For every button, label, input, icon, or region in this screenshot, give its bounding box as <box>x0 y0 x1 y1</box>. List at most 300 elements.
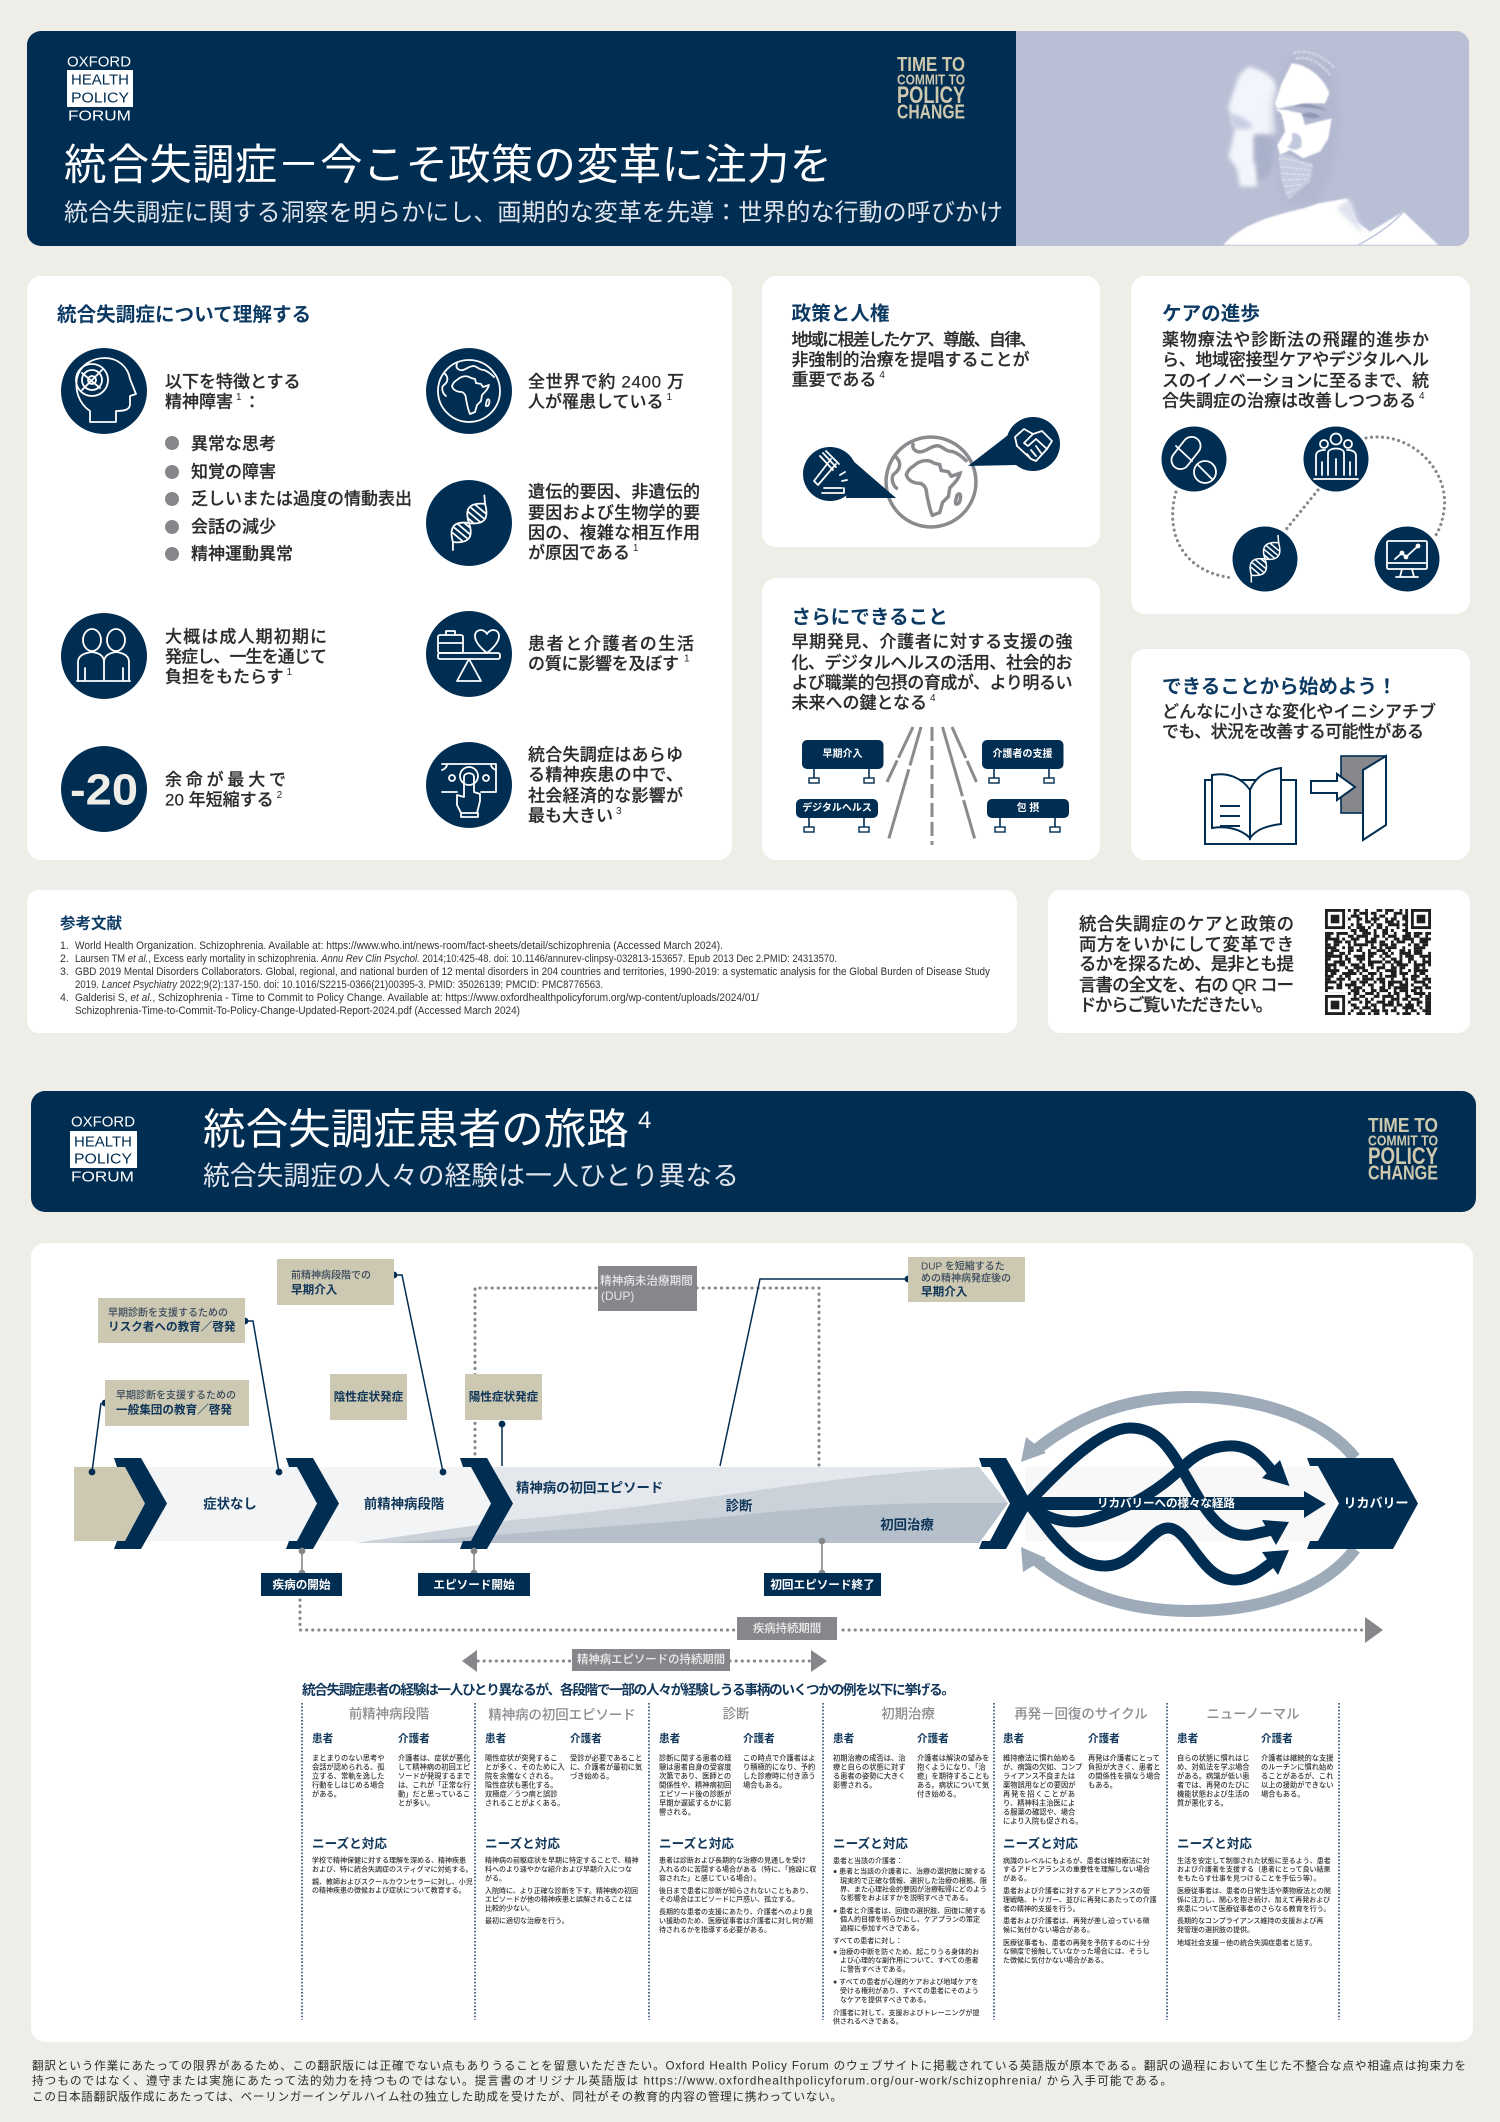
column: diagnosis: 患者 <box>659 1732 681 1745</box>
QR code <box>1325 909 1431 1015</box>
column: first episode: 介護者 <box>570 1732 602 1745</box>
reference list: Galderisi S, et al., Schizophrenia - Time to Commit to Policy Change. Available at: https://www.oxfordhealthpolicyforum.org/wp-content/uploads/2024/01/ <box>75 992 759 1004</box>
recovery block <box>1307 1458 1418 1549</box>
column: initial treatment: すべての患者に対し： <box>833 1936 902 1945</box>
translation disclaimer: この日本語翻訳版作成にあたっては、ベーリンガーインゲルハイム社の独立した助成を受けたが、同社がその教育的内容の管理に携わっていない。 <box>32 2090 842 2104</box>
panel: understanding schizophrenia: 20 年短縮する <box>165 790 274 810</box>
column: relapse-recovery cycle: するアドヒアランスの重要性を理解しない場合 <box>1003 1864 1150 1874</box>
icon: monitor <box>1374 526 1440 592</box>
panel: understanding schizophrenia: 3 <box>616 806 622 816</box>
superscript: 1 <box>684 654 690 664</box>
column: new normal: ニーズと対応 <box>1177 1836 1252 1851</box>
symptom list: 知覚の障害 <box>191 462 276 482</box>
milestone stems <box>299 1538 825 1576</box>
heading: できることから始めよう！ <box>1162 676 1397 698</box>
text: causes: 遺伝的要因、非遺伝的 <box>528 482 700 502</box>
column: initial treatment: よび心理的な副作用について、すべての患者 <box>840 1956 979 1964</box>
handshake <box>1015 429 1052 461</box>
column: new normal: 以上の援助ができない <box>1261 1780 1334 1790</box>
column: new normal: 生活を安定して制御された状態に至るよう、患者 <box>1177 1856 1331 1865</box>
callout: shorten DUP: DUP を短縮するた <box>921 1260 1005 1272</box>
panel: understanding schizophrenia: 1 <box>666 392 672 402</box>
column: relapse-recovery cycle: 者の精神的支援を行う。 <box>1003 1904 1080 1913</box>
column: prodromal: の精神疾患の徴候および症状について教育する。 <box>312 1886 466 1894</box>
column: initial treatment: ● すべての患者が心理的ケアおよび地域ケアを <box>833 1977 978 1986</box>
column: relapse-recovery cycle: により入院も促される。 <box>1003 1816 1083 1826</box>
logo: Time to Commit to Policy Change: COMMIT TO <box>1368 1132 1438 1150</box>
callout: negative symptoms: 陰性症状発症 <box>334 1390 404 1404</box>
milestone: illness onset: 疾病の開始 <box>273 1578 331 1592</box>
column: initial treatment: 個人的目標を明らかにし、ケアプランの策定 <box>840 1914 980 1924</box>
reference list: World Health Organization. Schizophrenia. Available at: https://www.who.int/news-room/fact-sheets/detail/schizophrenia (Accessed March 2024). <box>75 940 723 952</box>
icon: balance <box>426 611 512 697</box>
text: 早期発見、介護者に対する支援の強 <box>792 632 1072 652</box>
reference list: 2019. Lancet Psychiatry 2022;9(2):137-150. doi: 10.1016/S2215-0366(21)00395-3. PMID: 35026139; PMCID: PMC8776563. <box>75 979 603 991</box>
icon: minus 20 <box>61 746 147 832</box>
column: diagnosis: 長期的な患者の支援にあたり、介護者へのより良 <box>659 1907 813 1916</box>
callout: DUP: 精神病未治療期間 <box>600 1274 693 1288</box>
column: prodromal: 介護者 <box>398 1732 430 1745</box>
column: new normal: および介護者を支援する（患者にとって良い結果 <box>1177 1864 1330 1874</box>
column: initial treatment: 供されるべきである。 <box>833 2016 903 2026</box>
logo: Time to Commit to Policy Change: CHANGE <box>1368 1162 1438 1184</box>
reference list: 1. <box>60 940 69 952</box>
logo: Time to Commit to Policy Change: TIME TO <box>1368 1115 1438 1137</box>
column: initial treatment: 初期治療 <box>881 1706 935 1722</box>
column: relapse-recovery cycle: の関係性を損なう場合 <box>1088 1772 1161 1780</box>
panel: journey <box>31 1243 1473 2042</box>
subtitle: 統合失調症の人々の経験は一人ひとり異なる <box>203 1161 739 1191</box>
arrow: illness duration <box>1365 1617 1383 1643</box>
reference list: Laursen TM et al., Excess early mortality in schizophrenia. Annu Rev Clin Psychol. 2014;10:425-48. doi: 10.1146/annurev-clinpsy-032813-153657. Epub 2013 Dec 2.PMID: 24313570. <box>75 953 837 965</box>
column: first episode: 陽性症状が突発するこ <box>485 1754 558 1762</box>
column: new normal: 介護者 <box>1261 1732 1293 1745</box>
column: initial treatment: に警告すべきである。 <box>840 1964 909 1974</box>
callout: negative symptoms <box>330 1374 407 1420</box>
text: life expectancy: 余命が最大で <box>165 770 286 790</box>
stage labels: 症状なし <box>203 1496 257 1512</box>
column: prodromal: および、特に統合失調症のスティグマに対処する。 <box>312 1864 473 1874</box>
icon: money hand <box>426 742 512 828</box>
text: 統合失調症のケアと政策の <box>1079 914 1294 934</box>
column: initial treatment: 初期治療の成否は、治 <box>833 1754 906 1762</box>
column: relapse-recovery cycle: がある。 <box>1003 1874 1031 1882</box>
label: pathways to recovery: リカバリーへの様々な経路 <box>1097 1496 1235 1510</box>
logo: Time to Commit to Policy Change: CHANGE <box>897 102 965 124</box>
column: new normal <box>1177 1706 1334 1947</box>
column dividers <box>302 1703 1339 2020</box>
column: prodromal: ソードが発現するまで <box>398 1772 471 1780</box>
column: diagnosis: この時点で介護者はよ <box>743 1754 816 1762</box>
symptom list: 会話の減少 <box>191 518 276 536</box>
column: initial treatment: ある。病状について気 <box>917 1780 989 1790</box>
panel: what more can be done: 未来への鍵となる <box>792 694 927 712</box>
panel: understanding schizophrenia <box>27 276 732 860</box>
reference list: 2. <box>60 953 69 965</box>
column: diagnosis: 早期か遅延するかに影 <box>659 1798 732 1808</box>
column: diagnosis: り積極的になり、予約 <box>743 1762 815 1772</box>
column: first episode: 比較的少ない。 <box>485 1904 534 1912</box>
column: diagnosis: 験は患者自身の受容度 <box>659 1762 732 1772</box>
column: diagnosis: 容された」と感じている場合）。 <box>659 1874 760 1882</box>
translation disclaimer: 持つものではなく、遵守または実施にあたって法的効力を持つものではない。提言書のオリジナル英語版は https://www.oxfordhealthpolicyforum.org/our-work/schizophrenia/ から入手可能である。 <box>32 2074 1172 2088</box>
translation disclaimer <box>32 2058 1466 2104</box>
column: prodromal: 動」だと思っているこ <box>398 1790 470 1798</box>
symptom list: 異常な思考 <box>191 434 276 454</box>
callout: DUP <box>598 1266 697 1311</box>
column: diagnosis: 患者は診断および長期的な治療の見通しを受け <box>659 1856 806 1864</box>
logo: Time to Commit to Policy Change <box>897 54 965 124</box>
column: prodromal: ニーズと対応 <box>312 1836 387 1851</box>
column: first episode: 陰性症状も悪化する。 <box>485 1780 558 1790</box>
logo: Oxford Health Policy Forum: FORUM <box>71 1168 134 1186</box>
heading: 参考文献 <box>60 914 123 932</box>
sign: digital health <box>796 799 878 832</box>
panel: understanding schizophrenia: 精神障害 <box>165 392 233 412</box>
column: new normal: め、対処法を学ぶ場合 <box>1177 1762 1250 1772</box>
heading: さらにできること <box>792 606 948 628</box>
column: prodromal: 会話が認められる、孤 <box>312 1762 385 1772</box>
sign: inclusion <box>987 799 1069 832</box>
column: diagnosis: 響される。 <box>659 1808 695 1816</box>
column: prodromal <box>312 1706 473 1894</box>
column: first episode: 双極症／うつ病と誤診 <box>485 1790 558 1798</box>
column: diagnosis: 待されるかを指導する必要がある。 <box>659 1925 771 1934</box>
panel: what more can be done: 4 <box>930 692 936 704</box>
callout: shorten DUP: 早期介入 <box>921 1284 968 1298</box>
icon: book <box>1205 768 1296 844</box>
column: relapse-recovery cycle: な頻度で接触していなかった場合には、そうし <box>1003 1946 1150 1956</box>
sign: inclusion: 包 摂 <box>1017 801 1039 814</box>
stage labels: 前精神病段階 <box>364 1496 445 1512</box>
panel: understanding schizophrenia: 1 <box>236 392 242 402</box>
column: relapse-recovery cycle: 理戦略、トリガー、並びに再発にあたっての介護 <box>1003 1895 1157 1904</box>
icon: community group <box>1304 426 1368 492</box>
column: first episode: づき始める。 <box>570 1772 614 1780</box>
reference list: GBD 2019 Mental Disorders Collaborators. Global, regional, and national burden of 12 mental disorders in 204 countries and territories, 1990-2019: a systematic analysis for the Global Burden of Disease Study <box>75 966 991 978</box>
column: initial treatment: 受ける権利があり、すべての患者にそのよう <box>840 1986 979 1995</box>
column: prodromal: 行動をしはじめる場合 <box>312 1780 385 1790</box>
panel: understanding schizophrenia: 負担をもたらす <box>165 668 284 686</box>
logo: Oxford Health Policy Forum: OXFORD <box>67 54 131 70</box>
panel: progress in care <box>1131 276 1470 614</box>
label: episode duration <box>572 1649 730 1671</box>
panel: QR code call to action: るかを探るため、是非とも提 <box>1079 954 1294 974</box>
arrows: episode duration <box>462 1650 827 1672</box>
column: initial treatment: 現実的で正確な情報、選択した治療の根拠、限 <box>840 1876 987 1885</box>
column: relapse-recovery cycle: 負担が大きく、患者と <box>1088 1762 1161 1772</box>
column: prodromal: まとまりのない思考や <box>312 1754 385 1762</box>
column: initial treatment: ● 治療の中断を防ぐため、起こりうる身体的お <box>833 1947 979 1956</box>
shoulder <box>1223 198 1438 245</box>
column: first episode: に、介護者が最初に気 <box>570 1762 642 1772</box>
column: relapse-recovery cycle: り、精神科主治医によ <box>1003 1798 1075 1808</box>
column: first episode: 精神病の初回エピソード <box>488 1708 636 1722</box>
column: relapse-recovery cycle: 患者および介護者に対するアドヒアランスの管 <box>1003 1886 1150 1895</box>
column: new normal: 地域社会支援－他の統合失調症患者と話す。 <box>1177 1938 1316 1947</box>
column: prodromal: とが多い。 <box>398 1798 434 1808</box>
column: diagnosis: 入れるのに苦闘する場合がある（特に、「施設に収 <box>659 1864 816 1874</box>
column: relapse-recovery cycle: 患者および介護者は、再発が差し迫っている徴 <box>1003 1916 1150 1925</box>
column: initial treatment: 過程に参加すべきである。 <box>840 1924 923 1932</box>
features <box>1293 104 1327 111</box>
intro sentence: 統合失調症患者の経験は一人ひとり異なるが、各段階で一部の人々が経験しうる事柄のいくつかの例を以下に挙げる。 <box>302 1682 955 1698</box>
column: diagnosis: した診療時に付き添う <box>743 1772 816 1780</box>
panel: what more can be done: よび職業的包摂の育成が、より明るい <box>792 672 1072 692</box>
column: new normal: 疾患について医療従事者のさらなる教育を行う。 <box>1177 1904 1330 1913</box>
text: quality of life: 患者と介護者の生活 <box>528 634 694 654</box>
column: relapse-recovery cycle: ニーズと対応 <box>1003 1836 1078 1851</box>
column: diagnosis: その場合はエピソードに戸惑い、孤立する。 <box>659 1894 799 1904</box>
icon: globe <box>426 348 512 434</box>
column: first episode: 科へのより速やかな紹介および早期介入につな <box>485 1864 632 1874</box>
dotted line: DUP bracket <box>475 1288 819 1465</box>
column: prodromal: 学校で精神保健に対する理解を深める、精神疾患 <box>312 1856 466 1864</box>
sign: early intervention <box>802 740 884 783</box>
logo: Time to Commit to Policy Change: COMMIT TO <box>897 72 965 88</box>
heading: 政策と人権 <box>792 303 889 325</box>
logo: Time to Commit to Policy Change: POLICY <box>1368 1143 1438 1170</box>
text: socio-economic impact: 統合失調症はあらゆ <box>528 746 683 764</box>
panel: start where you can <box>1131 649 1470 860</box>
callout: at-risk education: リスク者への教育／啓発 <box>108 1320 236 1334</box>
panel: understanding schizophrenia: 最も大きい <box>528 806 613 826</box>
column: diagnosis: い援助のため、医療従事者は介護者に対し何が期 <box>659 1916 813 1925</box>
column: initial treatment: ● 患者と介護者は、回復の選択肢、回復に関する <box>833 1906 986 1915</box>
column: initial treatment: 癒」を期待することも <box>917 1772 990 1780</box>
reference list <box>60 940 991 1017</box>
translation disclaimer: 翻訳という作業にあたっての限界があるため、この翻訳版には正確でない点もありうることを留意いただきたい。Oxford Health Policy Forum のウェブサイトに掲載されている英語版が原本である。翻訳の過程において生じた不整合な点や相違点は拘束力を <box>32 2058 1466 2072</box>
panel: QR code call to action: ドからご覧いただきたい。 <box>1079 995 1273 1015</box>
logo: Time to Commit to Policy Change: TIME TO <box>897 54 965 76</box>
column: new normal: 者では、再発のたびに <box>1177 1780 1250 1790</box>
panel: understanding schizophrenia: 1 <box>633 542 639 554</box>
icon: DNA <box>426 480 512 566</box>
title: 統合失調症患者の旅路 <box>203 1106 629 1154</box>
column: prodromal: して精神病の初回エピ <box>398 1762 470 1772</box>
column: new normal: 自らの状態に慣れはじ <box>1177 1754 1250 1762</box>
panel: references <box>27 890 1017 1033</box>
callout: at-risk education <box>98 1298 245 1343</box>
callout: positive symptoms: 陽性症状発症 <box>469 1390 539 1404</box>
panel: QR code call to action: 両方をいかにして変革でき <box>1079 934 1294 954</box>
logo: Oxford Health Policy Forum: POLICY <box>71 90 129 106</box>
column: new normal: ニューノーマル <box>1207 1706 1299 1722</box>
panel: policy and human rights <box>762 276 1100 547</box>
panel: progress in care: ら、地域密接型ケアやデジタルヘル <box>1162 350 1429 370</box>
logo: Oxford Health Policy Forum <box>70 1114 137 1186</box>
column: new normal: のルーチンに慣れ始め <box>1261 1762 1334 1772</box>
column: relapse-recovery cycle: 患者 <box>1003 1732 1025 1745</box>
column: new normal: 機能状態および生活の <box>1177 1790 1250 1798</box>
recovery pathways <box>1028 1428 1326 1580</box>
panel: QR code call to action <box>1048 890 1470 1033</box>
callout: at-risk education: 早期診断を支援するための <box>108 1306 228 1319</box>
column: initial treatment: 介護者に対して、支援およびトレーニングが提 <box>833 2008 979 2017</box>
logo: Oxford Health Policy Forum <box>67 54 133 124</box>
leader lines <box>89 1272 911 1475</box>
column: first episode: 院を余儀なくされる。 <box>485 1772 558 1780</box>
logo: Oxford Health Policy Forum: FORUM <box>68 108 131 124</box>
callout: positive symptoms <box>465 1374 542 1420</box>
column: first episode: エピソードが他の精神疾患と誤解されることは <box>485 1894 632 1904</box>
sign: carer support: 介護者の支援 <box>992 747 1052 760</box>
right face cheek <box>1276 109 1332 158</box>
column: relapse-recovery cycle: 再発－回復のサイクル <box>1014 1706 1148 1722</box>
gavel <box>814 451 839 485</box>
recovery block: リカバリー <box>1343 1496 1409 1510</box>
shadow behind right face <box>1269 85 1282 136</box>
column: relapse-recovery cycle: 再発を招くことがあ <box>1003 1790 1075 1798</box>
column: first episode: されることがよくある。 <box>485 1798 564 1808</box>
panel: progress in care: 4 <box>1419 390 1425 402</box>
logo: Oxford Health Policy Forum: HEALTH <box>74 1134 132 1150</box>
text: 24 million: 全世界で約 2400 万 <box>528 372 684 392</box>
icon: pills <box>1162 426 1226 492</box>
header banner <box>27 31 1469 246</box>
milestone: first episode end <box>764 1573 881 1596</box>
column: relapse-recovery cycle: が、病識の欠如、コンプ <box>1003 1762 1083 1772</box>
milestone: first episode end: 初回エピソード終了 <box>770 1578 875 1592</box>
column: relapse-recovery cycle: た徴候に気付かない場合がある。 <box>1003 1956 1108 1964</box>
column: relapse-recovery cycle: もある。 <box>1088 1780 1117 1790</box>
right face forehead <box>1275 63 1329 109</box>
column: first episode: 受診が必要であること <box>570 1754 642 1762</box>
journey banner <box>31 1091 1476 1212</box>
column: initial treatment: 介護者は解決の望みを <box>917 1754 990 1762</box>
chevron: stage markers <box>114 1458 1032 1549</box>
column: initial treatment: 患者 <box>833 1732 855 1745</box>
sign: carer support <box>982 740 1064 783</box>
panel: what more can be done: 化、デジタルヘルスの活用、社会的お <box>792 652 1072 672</box>
dotted line: illness duration <box>300 1600 1365 1630</box>
stage labels: 診断 <box>726 1498 753 1514</box>
column: new normal: をもたらす仕事を見つけることを手伝う等）。 <box>1177 1874 1320 1882</box>
column: prodromal: 立する、常軌を逸した <box>312 1772 385 1780</box>
column: relapse-recovery cycle: 再発は介護者にとって <box>1088 1754 1160 1762</box>
column: diagnosis: 後日まで患者に診断が知らされないこともあり、 <box>659 1886 813 1895</box>
icon: door and arrow <box>1311 756 1386 840</box>
column: diagnosis: ニーズと対応 <box>659 1836 734 1851</box>
column: diagnosis: 関係性や、精神病初回 <box>659 1780 731 1790</box>
photo: two faces <box>1016 31 1469 246</box>
column: relapse-recovery cycle: 医療従事者も、患者の再発を予防するのに十分 <box>1003 1938 1150 1947</box>
column: new normal: ることがあるが、これ <box>1261 1772 1334 1780</box>
column: first episode: 精神病の前駆症状を早期に特定することで、精神 <box>485 1856 639 1864</box>
label: episode duration: 精神病エピソードの持続期間 <box>577 1652 725 1666</box>
column: diagnosis <box>659 1706 816 1934</box>
column: relapse-recovery cycle: 病識のレベルにもよるが、患者は維持療法に対 <box>1003 1856 1150 1865</box>
column: first episode: がる。 <box>485 1874 506 1882</box>
panel: policy and human rights: 4 <box>879 370 885 380</box>
recovery loops <box>1021 1397 1355 1611</box>
milestone: episode onset: エピソード開始 <box>433 1578 515 1592</box>
reference list: 4. <box>60 992 69 1004</box>
logo: Oxford Health Policy Forum: OXFORD <box>71 1114 135 1130</box>
column: initial treatment <box>833 1706 990 2026</box>
dotted connectors <box>1173 437 1445 578</box>
text: どんなに小さな変化やイニシアチブ <box>1162 702 1436 722</box>
column: new normal: 質が悪化する。 <box>1177 1798 1228 1808</box>
icon: two people <box>61 613 147 699</box>
column: relapse-recovery cycle <box>1003 1706 1161 1964</box>
column: initial treatment: 患者と当該の介護者： <box>833 1856 903 1865</box>
column: first episode: 患者 <box>485 1732 507 1745</box>
panel: understanding schizophrenia: 要因および生物学的要 <box>528 504 700 522</box>
column: initial treatment: 付き始める。 <box>917 1790 961 1798</box>
column: new normal: 係に注力し、関心を抱き続け、加えて再発および <box>1177 1895 1330 1904</box>
column: initial treatment: ニーズと対応 <box>833 1836 908 1851</box>
column: diagnosis: 場合もある。 <box>743 1780 787 1790</box>
symptom list <box>165 434 412 564</box>
hair <box>1293 52 1335 75</box>
panel: progress in care: スのイノベーションに至るまで、統 <box>1162 372 1429 390</box>
stage labels: 精神病の初回エピソード <box>516 1480 663 1496</box>
column: new normal: がある。病識が低い患 <box>1177 1772 1250 1780</box>
column: relapse-recovery cycle: 介護者 <box>1088 1732 1120 1745</box>
panel: what more can be done <box>762 578 1100 860</box>
logo: Oxford Health Policy Forum: POLICY <box>74 1150 132 1168</box>
stage labels <box>203 1480 934 1532</box>
title: 統合失調症－今こそ政策の変革に注力を <box>64 142 832 188</box>
panel: understanding schizophrenia: 発症し、一生を通じて <box>165 648 327 666</box>
panel: understanding schizophrenia: 人が罹患している <box>528 392 664 412</box>
stage labels: 初回治療 <box>880 1516 934 1532</box>
column: initial treatment: な影響をおよぼすかを説明すべきである。 <box>840 1893 972 1902</box>
panel: understanding schizophrenia: 2 <box>277 790 283 800</box>
panel: progress in care: 合失調症の治療は改善しつつある <box>1162 392 1416 410</box>
column: diagnosis: 介護者 <box>743 1732 775 1745</box>
journey band <box>74 1467 1335 1543</box>
column: first episode: ニーズと対応 <box>485 1836 560 1851</box>
callout: public education: 早期診断を支援するための <box>116 1388 236 1402</box>
column: diagnosis: 診断 <box>723 1706 749 1722</box>
text: characterised by: 以下を特徴とする <box>165 372 300 392</box>
text: 地域に根差したケア、尊厳、自律、 <box>792 330 1036 350</box>
reference list: Schizophrenia-Time-to-Commit-To-Policy-Change-Updated-Report-2024.pdf (Accessed March 2024) <box>75 1005 520 1017</box>
panel: understanding schizophrenia: 1 <box>287 666 293 678</box>
column: initial treatment: 介護者 <box>917 1732 949 1745</box>
left face <box>1228 67 1278 187</box>
column: first episode: とが多く、そのために入 <box>485 1762 566 1772</box>
column: prodromal: は、これが「正常な行 <box>398 1780 471 1790</box>
callout: shorten DUP <box>908 1257 1025 1302</box>
logo: Oxford Health Policy Forum: HEALTH <box>71 72 129 88</box>
column: diagnosis: 診断に関する患者の経 <box>659 1754 732 1762</box>
logo: Time to Commit to Policy Change <box>1368 1115 1438 1184</box>
column: new normal: 場合もある。 <box>1261 1790 1305 1798</box>
reference list: 3. <box>60 966 69 978</box>
dotted line: episode duration <box>478 1659 811 1663</box>
callout: public education: 一般集団の教育／啓発 <box>116 1402 232 1416</box>
column: prodromal: 親、教師およびスクールカウンセラーに対し、小児 <box>312 1877 473 1886</box>
column: initial treatment: る患者の姿勢に大きく <box>833 1772 906 1780</box>
callout: prodromal intervention: 早期介入 <box>291 1282 338 1296</box>
label: illness duration <box>737 1617 837 1640</box>
panel: understanding schizophrenia: 因の、複雑な相互作用 <box>528 524 700 542</box>
column: initial treatment: 療と自らの状態に対す <box>833 1762 906 1772</box>
logo: Time to Commit to Policy Change: POLICY <box>897 82 965 109</box>
panel: policy and human rights: 重要である <box>792 370 876 390</box>
column: initial treatment: 影響される。 <box>833 1780 877 1790</box>
road <box>887 727 976 845</box>
column: prodromal: 患者 <box>312 1732 334 1745</box>
column: new normal: 患者 <box>1177 1732 1199 1745</box>
panel: understanding schizophrenia: 社会経済的な影響が <box>528 786 683 806</box>
title: 4 <box>638 1106 651 1134</box>
column: initial treatment: ● 患者と当該の介護者に、治療の選択肢に関する <box>833 1866 986 1876</box>
panel: understanding schizophrenia: る精神疾患の中で、 <box>528 766 683 784</box>
